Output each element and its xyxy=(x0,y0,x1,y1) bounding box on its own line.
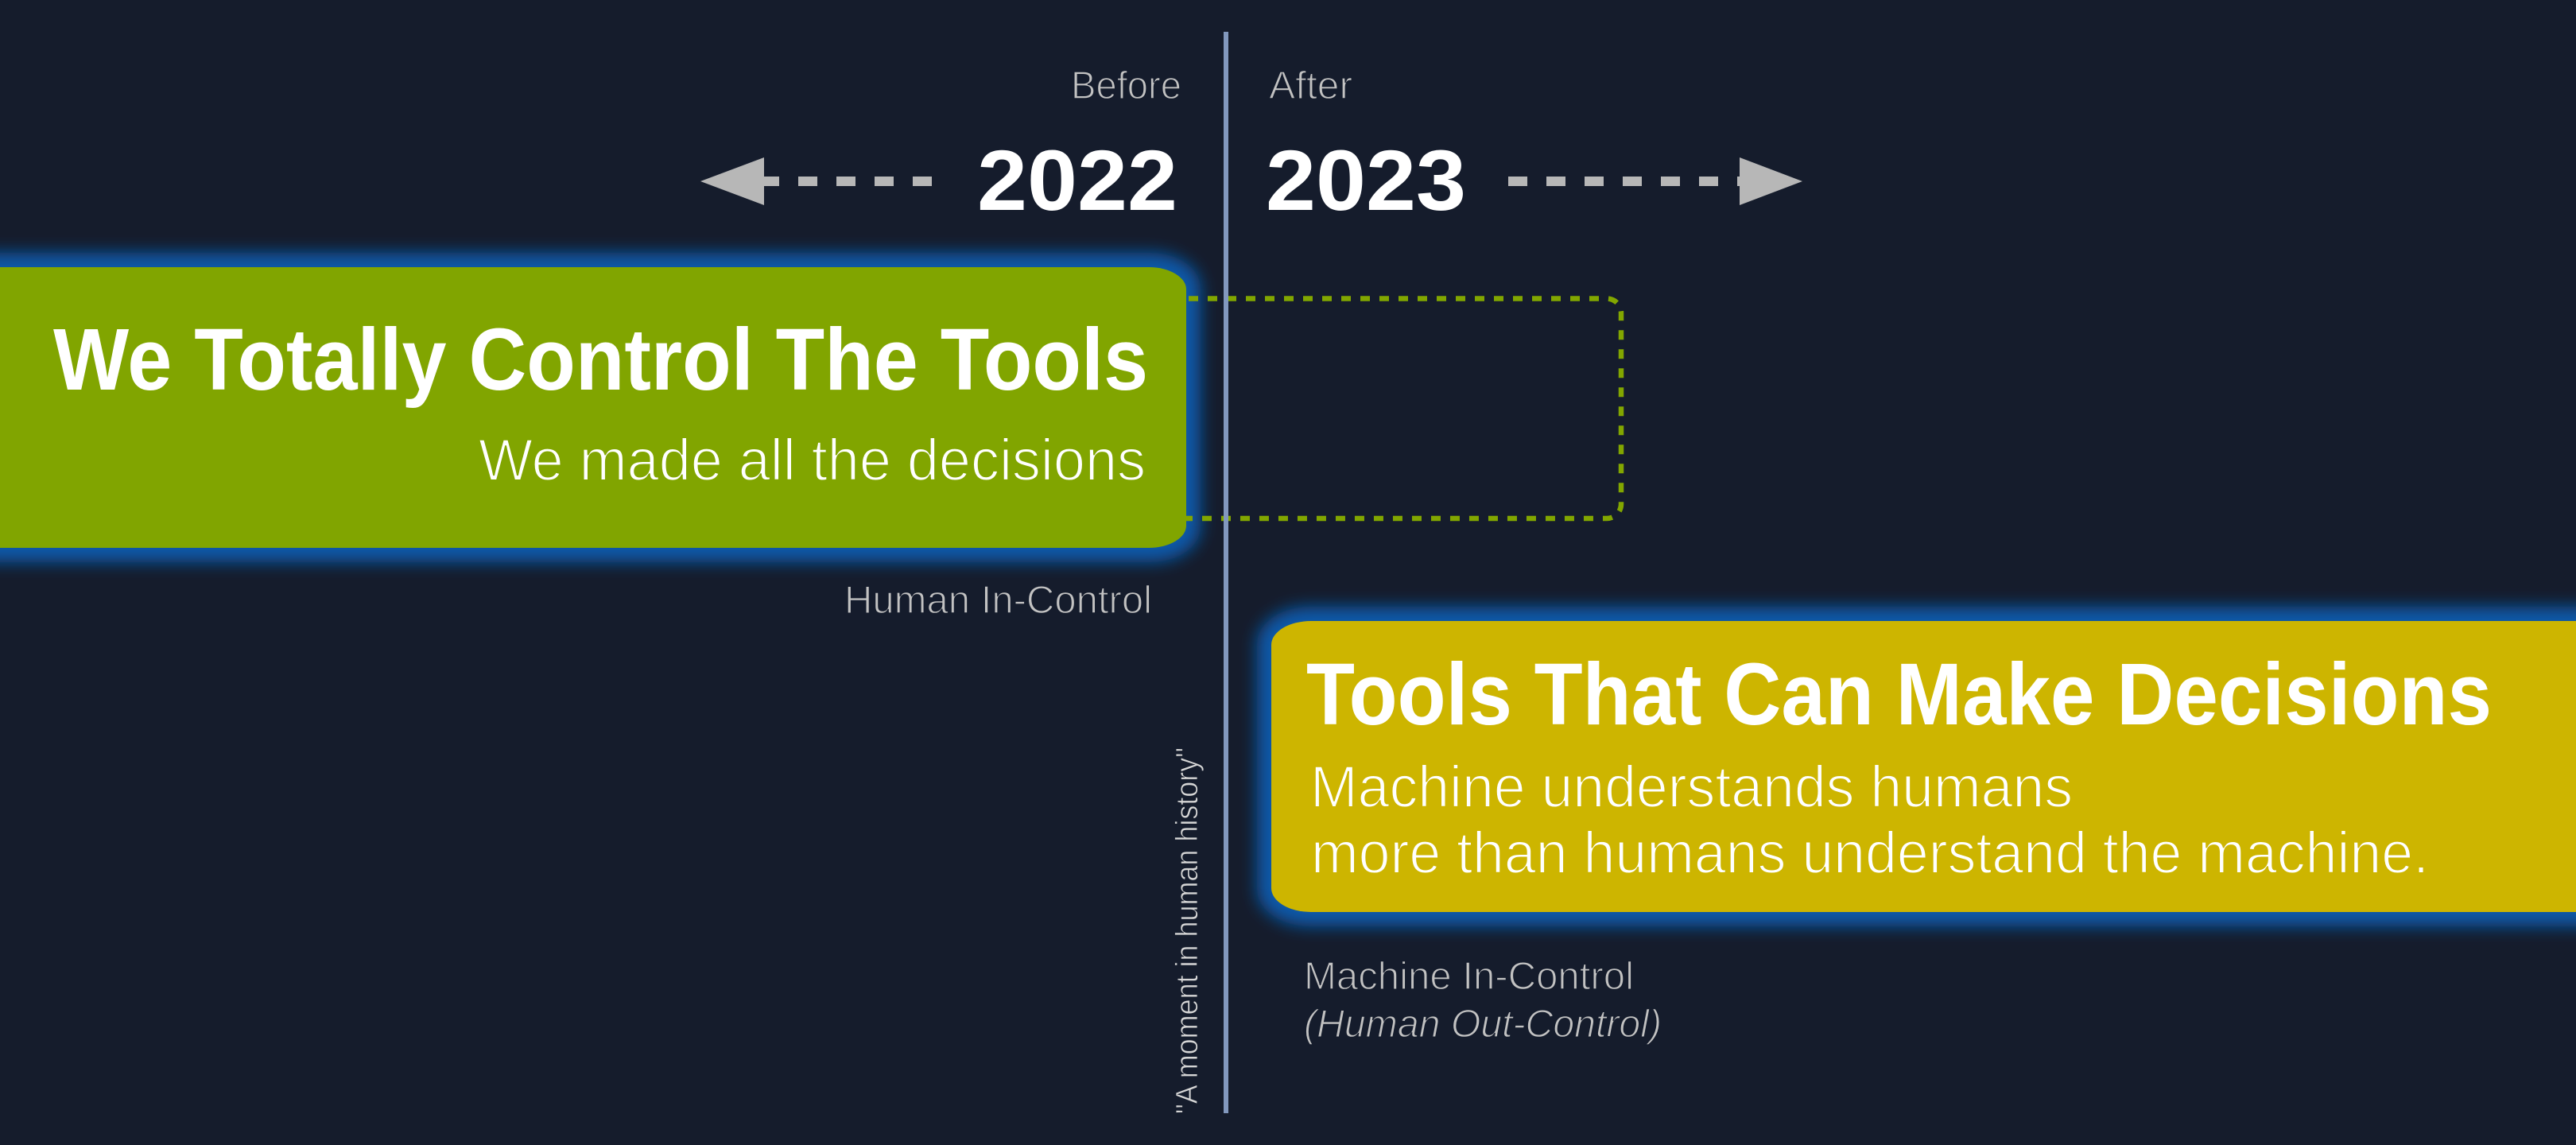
heading: we totally control the tools: We Totally Control The Tools xyxy=(53,311,1148,409)
year: 2023: 2023 xyxy=(1266,132,1466,228)
year: 2022: 2022 xyxy=(977,132,1177,228)
arrow: right, after xyxy=(1508,157,1802,205)
text: we made all the decisions: We made all the decisions xyxy=(479,427,1146,493)
caption: machine in-control: Machine In-Control xyxy=(1304,955,1634,998)
panel: human in control xyxy=(0,253,1201,562)
vertical note: a moment in human history: "A moment in human history" xyxy=(1170,747,1205,1114)
label: before: Before xyxy=(1071,64,1181,107)
text: machine understands humans: more than humans understand the machine. xyxy=(1311,820,2429,886)
timeline divider xyxy=(1224,32,1228,1113)
text: machine understands humans xyxy=(1310,754,2429,886)
caption: machine in-control xyxy=(1304,955,1662,1046)
caption: human in-control: Human In-Control xyxy=(844,579,1152,622)
caption: machine in-control: (Human Out-Control) xyxy=(1304,1003,1662,1046)
panel: machine in control xyxy=(1257,607,2576,926)
heading: tools that can make decisions: Tools That Can Make Decisions xyxy=(1306,646,2492,743)
text: machine understands humans: Machine understands humans xyxy=(1310,754,2073,820)
arrow: left, before xyxy=(700,157,932,205)
connector: dotted outline from the green panel xyxy=(1186,299,1621,518)
label: after: After xyxy=(1269,64,1352,107)
